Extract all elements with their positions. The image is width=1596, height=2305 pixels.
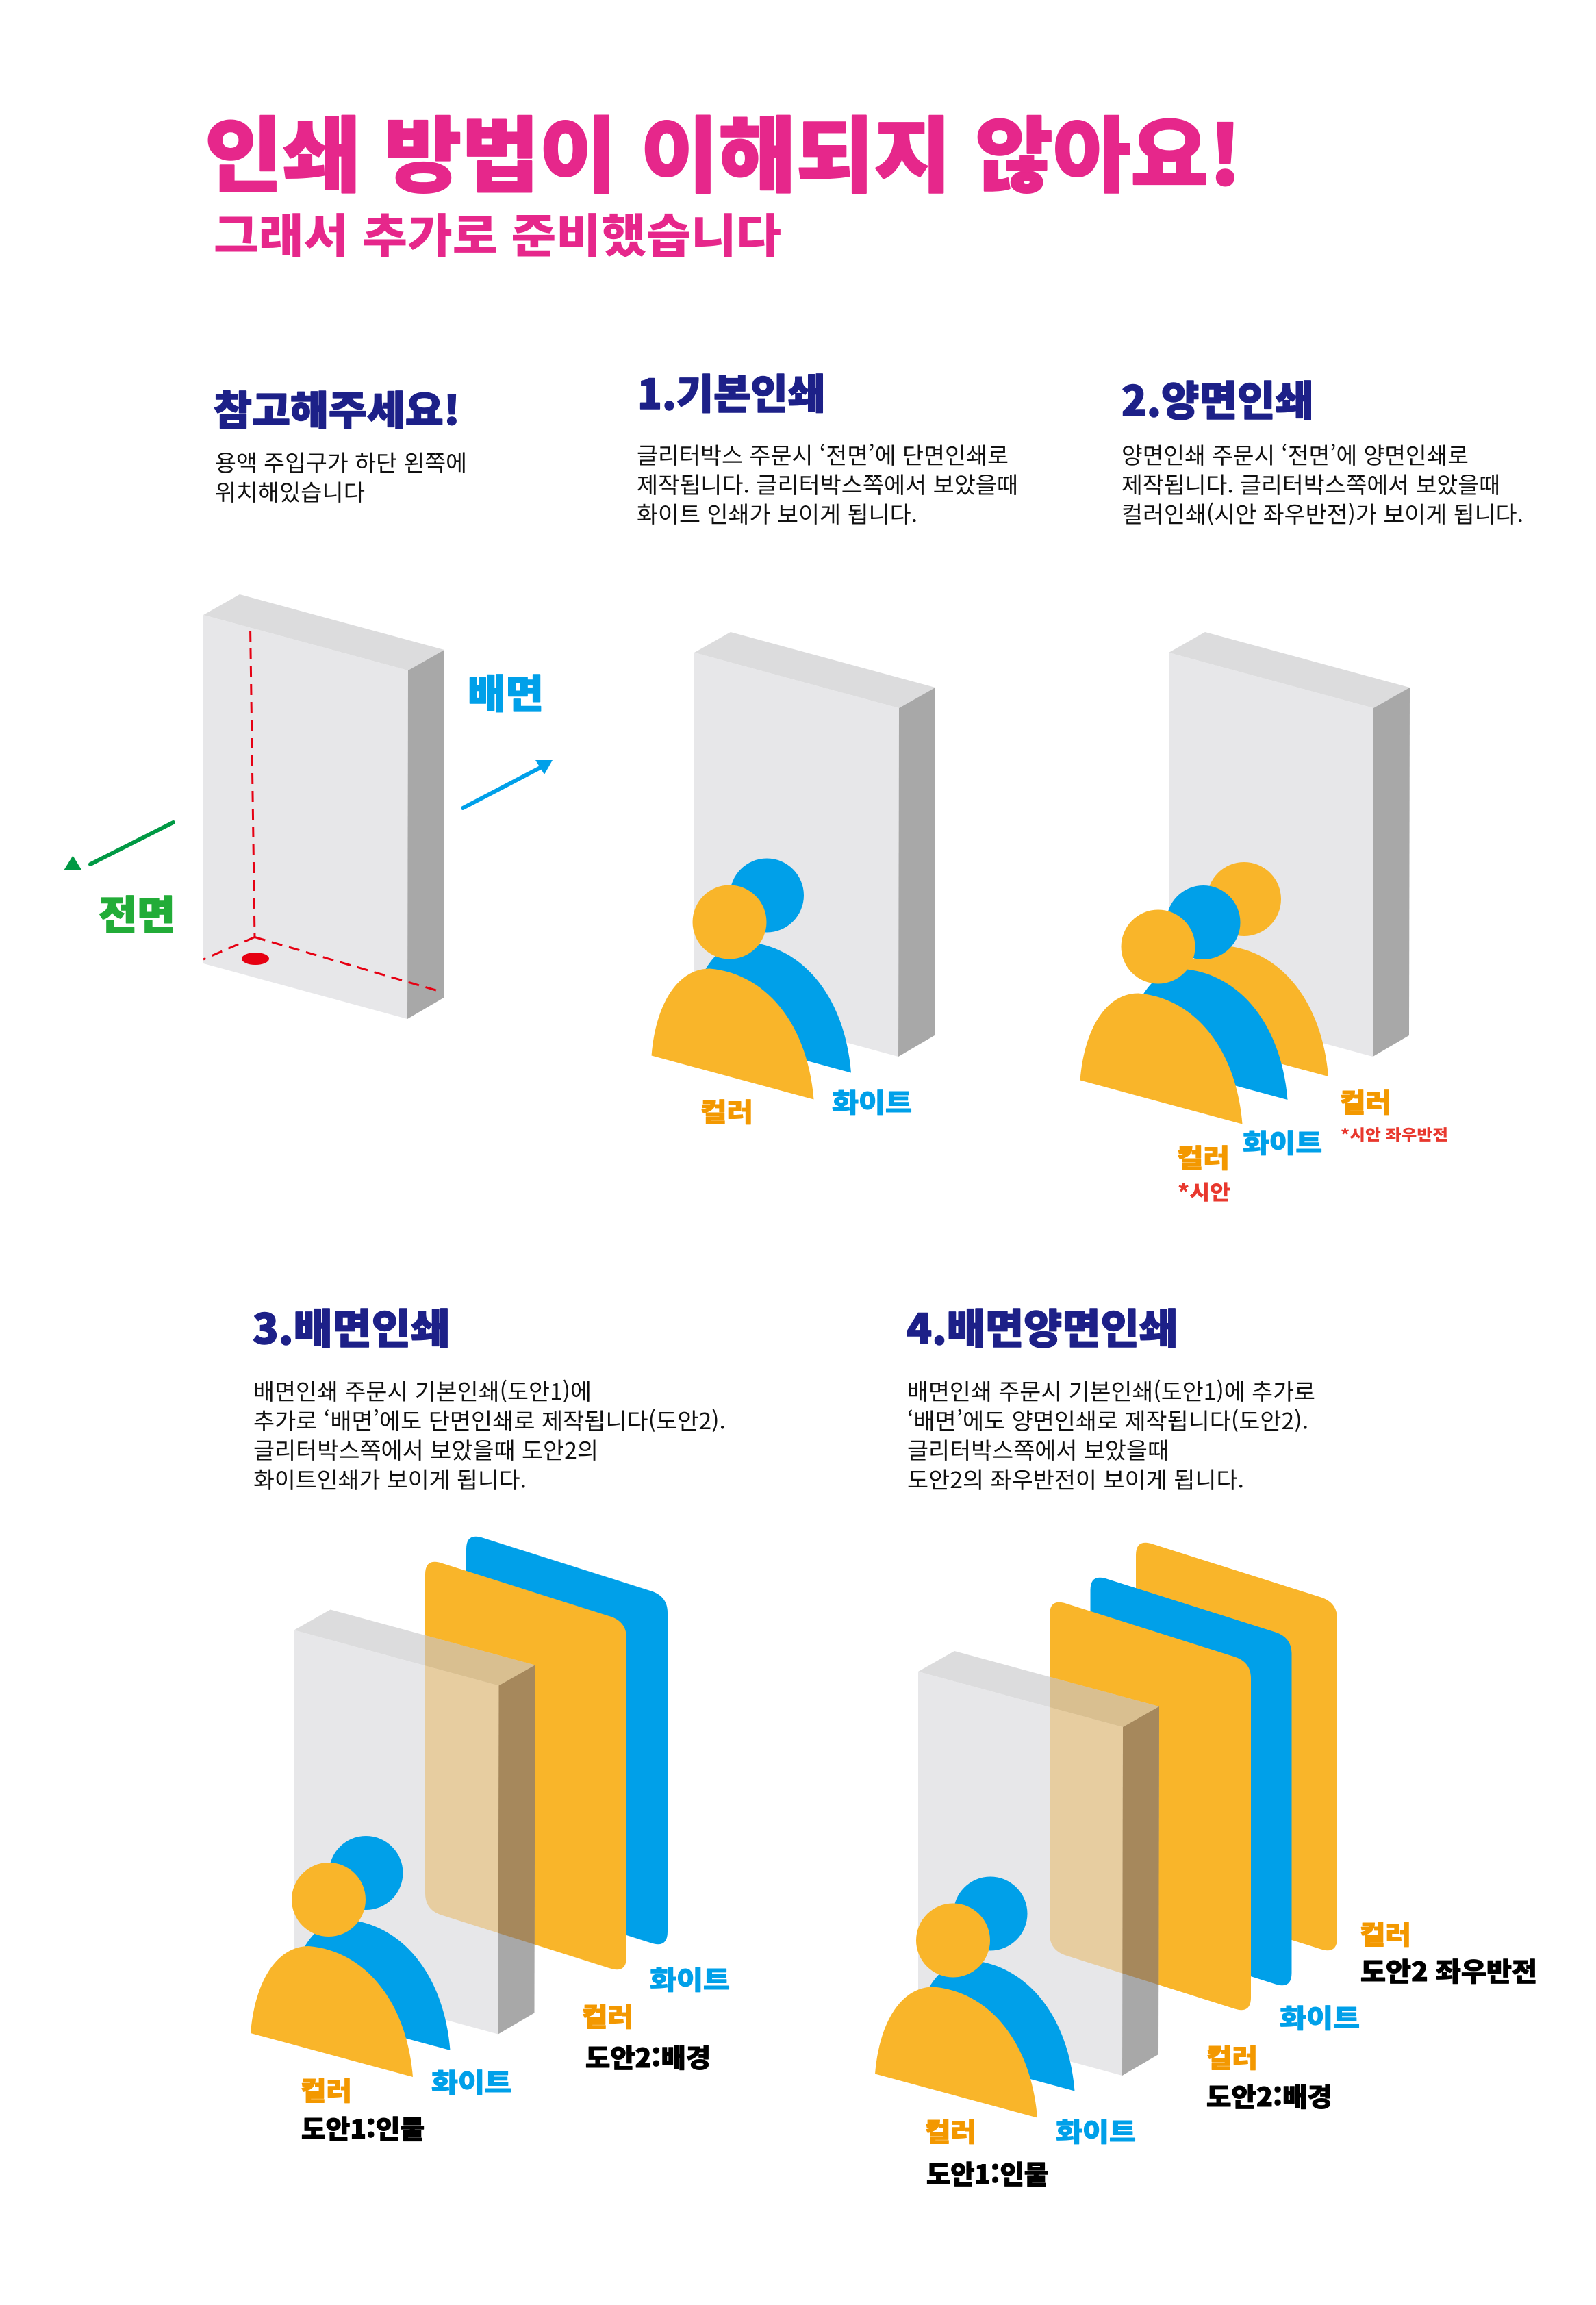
body 1: 제작됩니다. 글리터박스쪽에서 보았을때 bbox=[637, 467, 1018, 500]
person: back colour layer bbox=[1166, 862, 1328, 1076]
arrow: front side bbox=[64, 822, 173, 870]
label: colour, design 2: 컬러 bbox=[1206, 2037, 1258, 2075]
panel: back print bbox=[251, 1296, 730, 2146]
body 2: 제작됩니다. 글리터박스쪽에서 보았을때 bbox=[1122, 467, 1500, 500]
label: white, design 2: 화이트 bbox=[650, 1959, 730, 1997]
label: white: 화이트 bbox=[1280, 1998, 1360, 2035]
person: colour layer bbox=[875, 1904, 1037, 2117]
label: white, design 1: 화이트 bbox=[431, 2062, 511, 2100]
box 1 bbox=[694, 632, 935, 1057]
panel: note bbox=[64, 379, 553, 1019]
body 4: 도안2의 좌우반전이 보이게 됩니다. bbox=[907, 1462, 1244, 1495]
panel: basic print bbox=[637, 362, 1018, 1129]
box 2 bbox=[1169, 632, 1410, 1057]
sheet: white layer bbox=[1090, 1578, 1291, 1985]
product box with injection port bbox=[203, 594, 444, 1019]
box 4 (translucent over sheet) bbox=[918, 1651, 1159, 2076]
label: design 1: 도안1:인물 bbox=[926, 2154, 1048, 2191]
body 4: 글리터박스쪽에서 보았을때 bbox=[907, 1433, 1169, 1465]
label: colour, design 1: 컬러 bbox=[301, 2070, 352, 2108]
heading 3: 3.배면인쇄 bbox=[253, 1296, 450, 1356]
arrow: back side bbox=[463, 760, 553, 808]
body 3: 화이트인쇄가 보이게 됩니다. bbox=[253, 1462, 527, 1495]
body 2 bbox=[1122, 438, 1523, 529]
subtitle: 그래서 추가로 준비했습니다 bbox=[214, 199, 781, 266]
label: colour: 컬러 bbox=[700, 1092, 753, 1129]
label: colour, design 2: 컬러 bbox=[582, 1996, 633, 2034]
note body: 용액 주입구가 하단 왼쪽에 bbox=[215, 445, 467, 478]
body 1: 화이트 인쇄가 보이게 됩니다. bbox=[637, 496, 917, 529]
label: colour, design 2 mirrored: 컬러 bbox=[1360, 1914, 1411, 1952]
panel: double-sided print bbox=[1080, 368, 1523, 1206]
sheet: colour back layer bbox=[425, 1562, 626, 1969]
body 3: 배면인쇄 주문시 기본인쇄(도안1)에 bbox=[253, 1374, 592, 1407]
heading 1: 1.기본인쇄 bbox=[637, 362, 825, 421]
sheet: white back layer bbox=[466, 1537, 668, 1944]
box 3 (translucent over sheet) bbox=[294, 1609, 535, 2034]
person: front colour layer bbox=[1080, 909, 1242, 1124]
person: white layer bbox=[912, 1876, 1075, 2091]
sheet: colour front layer bbox=[1050, 1602, 1251, 2010]
note: cyan mirrored: *시안 좌우반전 bbox=[1341, 1123, 1448, 1145]
body 1: 글리터박스 주문시 ‘전면’에 단면인쇄로 bbox=[637, 438, 1009, 470]
label: design 2: 도안2:배경 bbox=[585, 2037, 711, 2075]
person: white layer bbox=[1126, 885, 1287, 1100]
label: white: 화이트 bbox=[1243, 1122, 1322, 1160]
body 4 bbox=[907, 1374, 1315, 1495]
note: cyan: *시안 bbox=[1178, 1176, 1230, 1206]
label: design 2: 도안2:배경 bbox=[1206, 2076, 1332, 2114]
body 4: 배면인쇄 주문시 기본인쇄(도안1)에 추가로 bbox=[907, 1374, 1315, 1407]
body 4: ‘배면’에도 양면인쇄로 제작됩니다(도안2). bbox=[907, 1403, 1308, 1436]
label: design 1: 도안1:인물 bbox=[301, 2108, 425, 2146]
person: colour layer bbox=[652, 885, 813, 1100]
title: 인쇄 방법이 이해되지 않아요! bbox=[205, 90, 1242, 209]
note body: 위치해있습니다 bbox=[215, 475, 365, 507]
label: colour, design 1: 컬러 bbox=[925, 2111, 976, 2149]
person: colour layer bbox=[251, 1863, 413, 2077]
label: back colour: 컬러 bbox=[1340, 1082, 1391, 1120]
sheet: colour rear layer bbox=[1136, 1543, 1337, 1950]
body 2: 양면인쇄 주문시 ‘전면’에 양면인쇄로 bbox=[1122, 438, 1469, 470]
note body bbox=[215, 445, 467, 507]
label: white, design 1: 화이트 bbox=[1056, 2111, 1136, 2149]
body 1 bbox=[637, 438, 1018, 529]
person: white layer bbox=[288, 1836, 451, 2050]
label: front side: 전면 bbox=[99, 883, 175, 941]
body 3: 글리터박스쪽에서 보았을때 도안2의 bbox=[253, 1433, 598, 1465]
panel: back double-sided print bbox=[875, 1296, 1537, 2191]
label: white: 화이트 bbox=[832, 1082, 912, 1120]
label: back side: 배면 bbox=[468, 662, 544, 720]
label: design 2 mirrored: 도안2 좌우반전 bbox=[1360, 1951, 1537, 1989]
body 3 bbox=[253, 1374, 726, 1495]
heading 2: 2.양면인쇄 bbox=[1122, 368, 1313, 428]
body 2: 컬러인쇄(시안 좌우반전)가 보이게 됩니다. bbox=[1122, 496, 1523, 529]
person: white layer bbox=[689, 859, 851, 1072]
body 3: 추가로 ‘배면’에도 단면인쇄로 제작됩니다(도안2). bbox=[253, 1403, 726, 1436]
label: front colour: 컬러 bbox=[1177, 1137, 1230, 1175]
note heading: 참고해주세요! bbox=[214, 379, 460, 436]
heading 4: 4.배면양면인쇄 bbox=[907, 1296, 1178, 1356]
